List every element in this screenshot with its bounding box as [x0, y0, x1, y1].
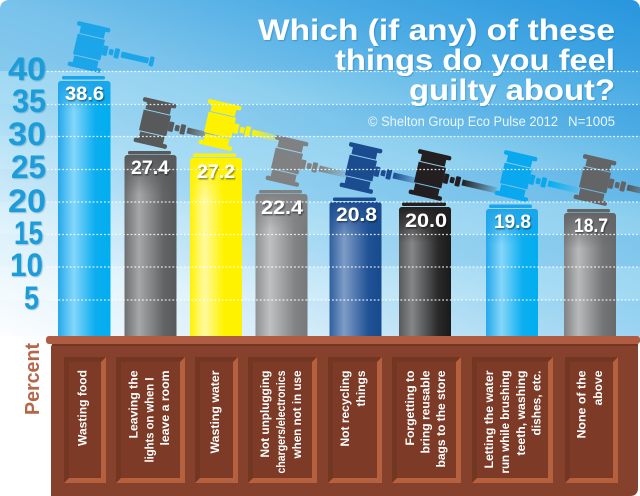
bar: wasting water: 27.2	[197, 162, 235, 183]
bar: not recycling	[330, 198, 382, 336]
icon: gavel navy	[339, 142, 425, 204]
panel: leaving the lights on: leave a room	[160, 370, 172, 446]
icon: gavel mid gray	[265, 135, 354, 198]
y axis scale: 25	[11, 149, 46, 185]
icon: gavel black	[408, 149, 501, 213]
panel: leaving the lights on: Leaving the	[129, 370, 141, 438]
panel: not recycling: things	[356, 370, 368, 406]
bar: none of the above	[564, 209, 616, 336]
panel: not recycling: Not recycling	[340, 370, 352, 446]
bar: forgetting reusable bags	[399, 202, 451, 336]
y axis scale: 10	[10, 247, 43, 283]
chart background	[0, 0, 640, 345]
panel: not recycling	[328, 357, 382, 483]
y axis scale: 35	[12, 83, 46, 119]
title: Which (if any) of these	[258, 14, 615, 47]
icon: gavel yellow	[198, 99, 287, 162]
panel: wasting food	[64, 357, 106, 483]
panel: not unplugging chargers: when not in use	[292, 370, 304, 460]
panel: wasting water	[195, 357, 238, 483]
y axis scale: 40	[8, 51, 46, 87]
icon: gavel light blue 1	[67, 21, 159, 84]
bar: leaving the lights on	[124, 151, 176, 336]
panel: not unplugging chargers	[248, 357, 317, 483]
gridlines	[47, 72, 640, 300]
panel: forgetting reusable bags	[392, 357, 461, 483]
bar: wasting water	[190, 154, 242, 336]
icon: gavel light blue 2	[494, 150, 584, 213]
bar: not recycling: 20.8	[336, 205, 377, 226]
title: guilty about?	[409, 74, 615, 107]
panel: letting the water run: run while brushing	[500, 370, 512, 474]
panel: letting the water run: teeth, washing	[516, 370, 528, 456]
panel: leaving the lights on	[116, 357, 185, 483]
icon: gavel gray right	[573, 154, 640, 217]
panel: none of the above	[565, 357, 618, 483]
bar: letting the water run: 19.8	[494, 212, 531, 233]
bar: forgetting reusable bags: 20.0	[405, 211, 447, 232]
panel: not unplugging chargers: Not unplugging	[260, 370, 272, 458]
panel: letting the water run	[472, 357, 553, 483]
panel: not unplugging chargers: chargers/electronics	[276, 370, 288, 474]
bar: not unplugging chargers	[256, 190, 308, 336]
bar: letting the water run	[486, 204, 538, 336]
panel: forgetting reusable bags: bags to the store	[436, 370, 448, 468]
y axis scale: 30	[8, 116, 46, 152]
panel: forgetting reusable bags: Forgetting to	[405, 370, 417, 446]
panel: letting the water run: Letting the water	[484, 370, 496, 468]
bar: wasting food: 38.6	[65, 84, 104, 105]
y axis scale	[8, 51, 46, 316]
y axis scale: 15	[14, 215, 43, 251]
bar: not unplugging chargers: 22.4	[261, 198, 303, 219]
y axis scale: 5	[24, 280, 39, 316]
title: things do you feel	[335, 44, 615, 77]
panel: wasting water: Wasting water	[210, 370, 222, 453]
panel: letting the water run: dishes, etc.	[532, 370, 544, 436]
panel: wasting food: Wasting food	[78, 370, 90, 446]
bar: wasting food	[58, 76, 110, 336]
panel: forgetting reusable bags: bring reusable	[420, 370, 432, 454]
axis title: percent: Percent	[22, 343, 44, 415]
title	[258, 14, 615, 107]
source note: © Shelton Group Eco Pulse 2012	[368, 114, 558, 129]
chocolate bar base	[46, 336, 640, 496]
panel: none of the above: above	[593, 370, 605, 406]
y axis scale: 20	[8, 183, 46, 219]
source note: N=1005	[568, 114, 615, 129]
panel: none of the above: None of the	[576, 370, 588, 438]
icon: gavel dark gray	[133, 97, 220, 159]
panel: leaving the lights on: lights on when I	[145, 378, 157, 462]
bar: none of the above: 18.7	[574, 216, 608, 237]
bar: leaving the lights on: 27.4	[131, 158, 169, 179]
